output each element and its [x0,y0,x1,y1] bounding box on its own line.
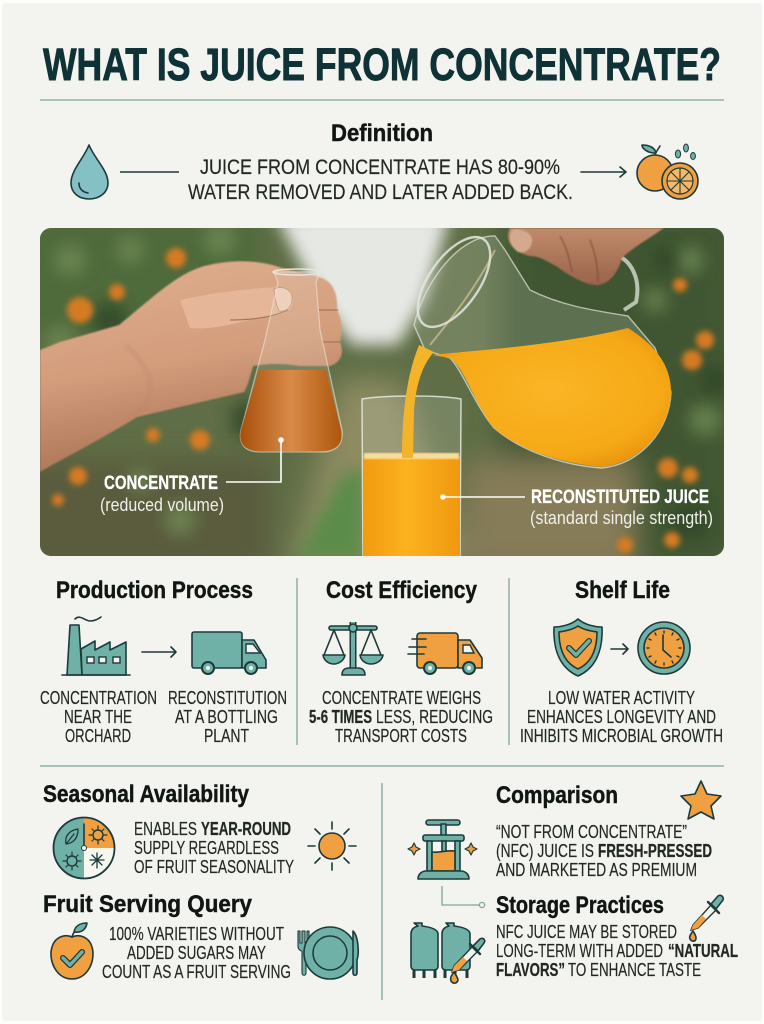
text: fruit serving [102,924,291,982]
text: seasonal: YEAR-ROUND [201,819,291,839]
text: reconstitution: PLANT [204,726,249,746]
juice glass [362,396,461,566]
heading: Storage Practices [496,892,664,919]
text: fruit serving: 100% VARIETIES WITHOUT [109,924,284,944]
text: fruit serving: ADDED SUGARS MAY [127,943,266,963]
icon: oranges [637,144,698,199]
label: concentrate: CONCENTRATE [104,473,218,494]
panel: comparison [408,781,721,880]
flask [240,269,342,452]
right hand [508,228,664,285]
text: cost: TRANSPORT COSTS [335,726,467,746]
label: reconstituted juice: (standard single strength) [530,508,713,528]
text: cost: LESS, REDUCING [376,707,493,727]
juice stream [402,345,434,458]
icon: star [681,781,721,819]
icon: scales [323,622,383,675]
icon: dropper [690,895,723,941]
text: storage: LONG-TERM WITH ADDED [496,941,663,961]
text: storage [496,922,738,980]
text: storage: TO ENHANCE TASTE [568,960,701,980]
icon: tanks [411,923,470,978]
text: cost: CONCENTRATE WEIGHS [322,688,481,708]
text: seasonal: OF FRUIT SEASONALITY [134,857,294,877]
panel: storage practices [411,892,738,983]
text: shelf life [520,688,723,746]
panel: definition [71,120,698,204]
heading: Fruit Serving Query [43,891,252,918]
icon: dropper over tanks [451,938,485,983]
icon: juice press [408,820,477,879]
text: seasonal: SUPPLY REGARDLESS [134,838,279,858]
icon: delivery truck [408,633,482,674]
text: comparison: AND MARKETED AS PREMIUM [496,860,697,880]
connector [442,886,485,908]
text: storage: “NATURAL [668,941,738,961]
arrow: right [581,167,626,177]
definition text [188,155,573,204]
photo: concentrate flask and juice pitcher [40,228,724,556]
label: reconstituted juice: RECONSTITUTED JUICE [531,487,709,508]
arrow [142,647,176,657]
panel: seasonal availability [43,781,356,878]
arrow [611,644,628,654]
text: fruit serving: COUNT AS A FRUIT SERVING [102,962,291,982]
text: concentration [40,688,157,746]
icon: factory [62,617,130,675]
icon: plate [298,927,358,979]
panel: shelf life [520,577,723,746]
text: comparison: “NOT FROM CONCENTRATE” [496,822,687,842]
text: concentration: NEAR THE [64,707,132,727]
icon: clock [638,622,690,674]
definition text: WATER REMOVED AND LATER ADDED BACK. [188,180,573,204]
heading: Shelf Life [575,577,670,604]
icon: seasons clock [54,818,114,878]
text: comparison: FRESH-PRESSED [598,841,712,861]
heading: Cost Efficiency [326,577,477,604]
icon: truck [192,632,266,674]
panel: cost efficiency [309,577,493,746]
text: concentration: ORCHARD [65,726,131,746]
text: reconstitution: AT A BOTTLING [175,707,278,727]
panel: production process [40,577,287,746]
text: reconstitution [168,688,287,746]
text: cost [309,688,493,746]
heading: Seasonal Availability [43,781,249,808]
text: reconstitution: RECONSTITUTION [168,688,287,708]
panel: fruit serving query [43,891,358,982]
left hand [40,261,342,472]
icon: water drop [71,145,108,199]
definition text: JUICE FROM CONCENTRATE HAS 80-90% [200,155,560,179]
text: comparison: (NFC) JUICE IS [496,841,594,861]
text: seasonal [134,819,294,877]
text: comparison [496,822,712,880]
heading: Production Process [56,577,253,604]
text: seasonal: ENABLES [134,819,197,839]
icon: shield [554,619,602,676]
icon: apple check [51,923,93,979]
label: reconstituted juice [440,487,713,528]
definition heading: Definition [331,120,433,147]
label: concentrate: (reduced volume) [100,495,224,515]
arrow: left line [120,171,179,173]
text: storage: FLAVORS” [496,960,565,980]
text: concentration: CONCENTRATION [40,688,157,708]
text: storage: NFC JUICE MAY BE STORED [496,922,677,942]
photo background: orchard [40,228,724,556]
text: cost: 5-6 TIMES [309,707,372,727]
heading: Comparison [496,782,618,809]
label: concentrate [100,437,284,515]
pitcher [404,225,671,468]
icon: sun [308,822,356,870]
text: shelf life: LOW WATER ACTIVITY [548,688,695,708]
